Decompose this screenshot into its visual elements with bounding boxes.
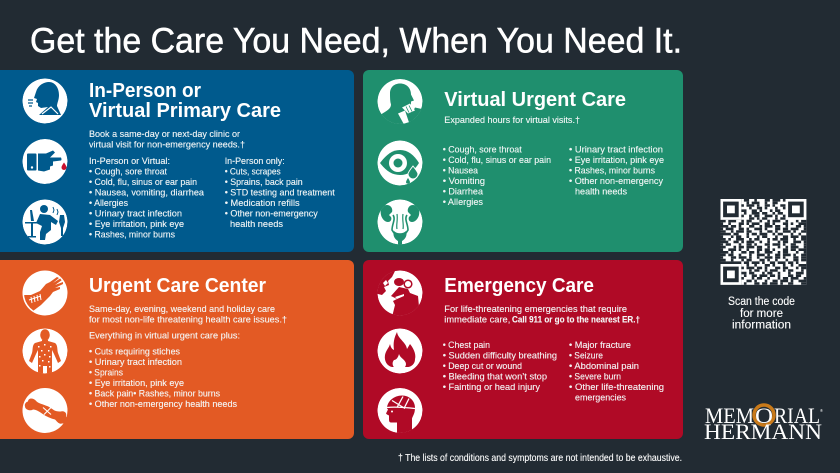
text: emergency intro: For life-threatening emergencies that require <box>444 304 627 315</box>
list: in-person only: health needs <box>230 219 283 230</box>
list: emergency care column 2: • Seizure <box>569 350 603 362</box>
list: emergency care column 1 <box>443 340 557 393</box>
list: urgent care center: • Back pain• Rashes, minor burns <box>89 388 220 400</box>
heading: emergency care: Emergency Care <box>444 275 594 297</box>
QR caption: for more <box>740 308 783 320</box>
QR caption: information <box>732 320 791 332</box>
icon: broken bone <box>22 388 68 433</box>
text: urgent care intro: Same-day, evening, weekend and holiday care <box>89 304 275 315</box>
text: primary care intro: Book a same-day or next-day clinic or <box>89 129 241 140</box>
heading: primary care <box>89 80 281 122</box>
list: in-person or virtual <box>89 156 205 240</box>
list: emergency care column 1: • Fainting or head injury <box>443 382 540 393</box>
icon: coughing person <box>22 78 68 124</box>
list: in-person only: • Other non-emergency <box>225 208 318 220</box>
text: urgent care intro: for most non-life threatening health care issues.† <box>89 314 287 326</box>
list: urgent care center: • Urinary tract infection <box>89 357 182 368</box>
list: in-person only: • Sprains, back pain <box>225 177 303 188</box>
list: emergency care column 2: • Abdominal pain <box>569 361 639 372</box>
logo: Memorial Hermann: HERMANN <box>704 419 822 444</box>
list: virtual urgent care column 2: • Other non-emergency <box>569 176 663 187</box>
QR caption: Scan the code <box>728 296 795 308</box>
list: in-person or virtual: • Urinary tract infection <box>89 208 182 220</box>
list: urgent care center: • Eye irritation, pink eye <box>89 378 184 389</box>
text: primary care intro <box>89 129 245 150</box>
list: emergency care column 2: emergencies <box>575 392 626 404</box>
icon: finger cut <box>22 139 68 184</box>
QR code <box>720 199 806 285</box>
list: virtual urgent care column 1: • Diarrhea <box>443 187 484 198</box>
list: virtual urgent care column 1: • Vomiting <box>443 176 485 187</box>
panel: emergency care <box>363 260 683 439</box>
list: in-person or virtual: • Nausea, vomiting, diarrhea <box>89 188 205 198</box>
heading: virtual urgent care: Virtual Urgent Care <box>444 89 626 111</box>
panel: in-person or virtual primary care <box>0 70 354 252</box>
list: virtual urgent care column 2: • Eye irritation, pink eye <box>569 155 664 166</box>
text: emergency intro: Call 911 or go to the nearest ER.† <box>512 314 640 326</box>
list: in-person or virtual: • Rashes, minor burns <box>89 230 175 240</box>
list: urgent care center: • Other non-emergency health needs <box>89 399 237 410</box>
text: virtual urgent care intro: Expanded hours for virtual visits.† <box>444 115 580 126</box>
list: virtual urgent care column 1: • Cold, flu, sinus or ear pain <box>443 155 551 166</box>
list: in-person or virtual: In-Person or Virtual: <box>89 156 170 167</box>
list: in-person or virtual: • Cough, sore throat <box>89 166 167 178</box>
list: emergency care column 2 <box>569 340 664 404</box>
text: urgent care intro <box>89 304 287 342</box>
text: emergency intro <box>444 304 640 326</box>
list: emergency care column 1: • Sudden difficulty breathing <box>443 350 557 362</box>
list: virtual urgent care column 2: • Urinary tract infection <box>569 145 663 156</box>
text: primary care intro: virtual visit for non-emergency needs.† <box>89 140 245 150</box>
list: emergency care column 1: • Deep cut or wound <box>443 361 522 372</box>
icon: person with rash <box>22 328 68 375</box>
QR caption <box>728 296 795 332</box>
logo: Memorial Hermann: ® <box>820 408 823 413</box>
list: virtual urgent care column 1: • Allergies <box>443 197 483 208</box>
panel: virtual urgent care <box>363 70 683 252</box>
list: in-person only: • Cuts, scrapes <box>225 166 281 178</box>
list: virtual urgent care column 2 <box>569 145 664 198</box>
footnote: † The lists of conditions and symptoms are not intended to be exhaustive. <box>398 453 682 464</box>
logo: Memorial Hermann: RIAL <box>774 403 820 428</box>
logo: Memorial Hermann: MEM <box>705 403 754 428</box>
panel: urgent care center <box>0 260 354 439</box>
text: urgent care intro: Everything in virtual urgent care plus: <box>89 330 240 342</box>
icon: person with tissue <box>378 79 422 124</box>
list: in-person or virtual: • Cold, flu, sinus or ear pain <box>89 177 197 188</box>
text: emergency intro: immediate care, <box>444 314 510 326</box>
logo: Memorial Hermann <box>704 403 823 444</box>
list: emergency care column 1: • Chest pain <box>443 340 490 351</box>
list: urgent care center: • Sprains <box>89 368 123 378</box>
list: virtual urgent care column 2: • Rashes, minor burns <box>569 166 655 177</box>
icon: watering eye <box>378 140 422 186</box>
heading: primary care: Virtual Primary Care <box>89 100 281 122</box>
icon: kidneys and urinary tract <box>378 200 422 245</box>
heading: urgent care center: Urgent Care Center <box>89 275 266 297</box>
list: virtual urgent care column 1: • Nausea <box>443 166 479 177</box>
icon: bandaged head <box>378 388 422 434</box>
icon: flame <box>378 328 422 374</box>
icon: stitched hand <box>20 270 68 316</box>
list: in-person only <box>225 156 335 230</box>
title: Get the Care You Need, When You Need It. <box>30 22 682 60</box>
list: emergency care column 2: • Major fracture <box>569 340 631 351</box>
list: virtual urgent care column 2: health needs <box>575 187 627 198</box>
list: in-person only: • Medication refills <box>225 198 300 209</box>
logo: Memorial Hermann: O <box>755 403 773 428</box>
icon: choking person <box>378 270 422 316</box>
list: urgent care center: • Cuts requiring stiches <box>89 346 180 358</box>
list: urgent care center <box>89 346 237 410</box>
list: emergency care column 1: • Bleeding that won’t stop <box>443 372 547 382</box>
list: virtual urgent care column 1: • Cough, sore throat <box>443 145 522 156</box>
list: in-person or virtual: • Eye irritation, pink eye <box>89 219 184 230</box>
heading: primary care: In-Person or <box>89 80 201 102</box>
list: in-person or virtual: • Allergies <box>89 198 128 209</box>
icon: person with headache at desk <box>22 200 68 244</box>
list: in-person only: • STD testing and treatment <box>225 188 335 198</box>
list: emergency care column 2: • Severe burn <box>569 372 621 382</box>
list: virtual urgent care column 1 <box>443 145 551 208</box>
list: emergency care column 2: • Other life-threatening <box>569 382 664 393</box>
list: in-person only: In-Person only: <box>225 156 285 167</box>
